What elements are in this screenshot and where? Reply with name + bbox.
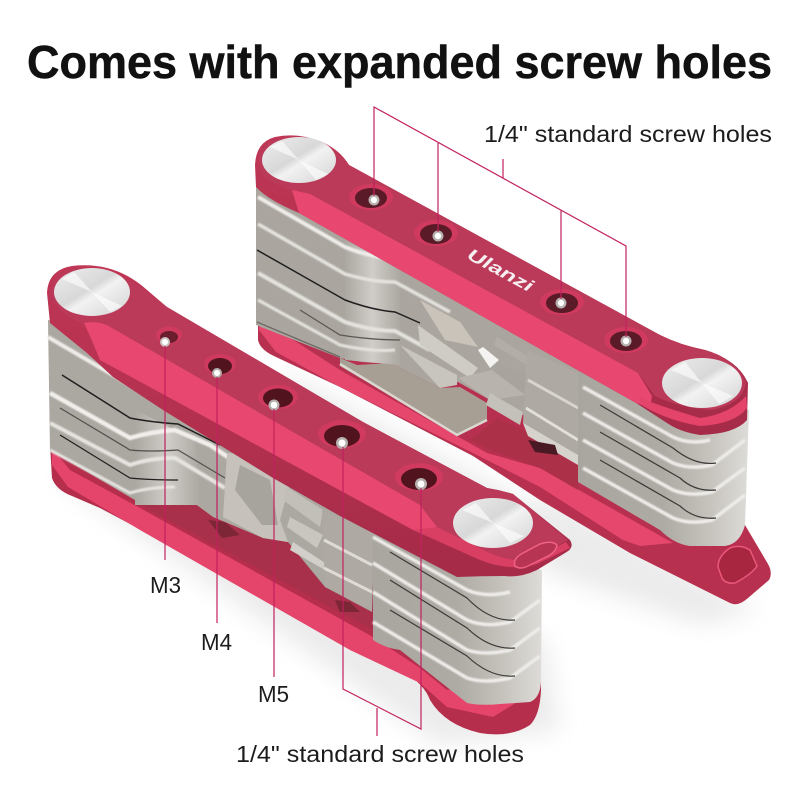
title: Comes with expanded screw holes <box>27 36 772 88</box>
rear tool key-ring hole <box>718 546 757 583</box>
product: front multi-tool <box>47 265 572 734</box>
rear screw hole 3 <box>540 289 584 315</box>
callout lines: front 1/4 holes <box>343 447 421 736</box>
front tool bits <box>208 453 372 612</box>
label: front screw holes: 1/4" standard screw holes <box>236 741 524 767</box>
label: M5: M5 <box>258 681 289 707</box>
rear screw hole 2 <box>414 220 458 246</box>
front tool top plate <box>47 265 572 577</box>
product: rear multi-tool <box>255 135 771 604</box>
Ulanzi logo: Ulanzi <box>464 245 538 297</box>
front 1/4 screw hole 1 <box>318 420 366 449</box>
label: M4: M4 <box>201 629 232 655</box>
label: M3: M3 <box>150 572 181 598</box>
callout lines: M3 M4 M5 <box>165 346 274 677</box>
rear disc right <box>662 358 742 408</box>
M3 screw hole <box>156 326 182 347</box>
rear tool bits <box>400 300 578 465</box>
rear disc left <box>262 137 336 183</box>
front tool steel stack, right section <box>373 520 542 705</box>
front disc left <box>54 268 130 316</box>
rear tool inner floor <box>340 358 487 435</box>
rear screw hole 4 <box>604 327 648 353</box>
front tool base <box>50 440 541 734</box>
M4 screw hole <box>204 354 236 378</box>
front 1/4 screw hole 2 <box>395 463 443 491</box>
rear tool base <box>258 300 771 604</box>
M5 screw hole <box>258 385 298 410</box>
rear tool top plate <box>255 135 748 435</box>
rear tool steel stack, right section <box>578 368 749 546</box>
front disc right <box>453 498 533 548</box>
front tool steel stack, left section <box>48 320 375 612</box>
rear screw hole 1 <box>349 184 393 210</box>
callout lines: rear 1/4 holes <box>374 107 626 337</box>
floor shadows <box>60 370 760 745</box>
label: rear screw holes: 1/4" standard screw holes <box>484 121 772 147</box>
rear tool steel stack, left section <box>256 185 578 440</box>
